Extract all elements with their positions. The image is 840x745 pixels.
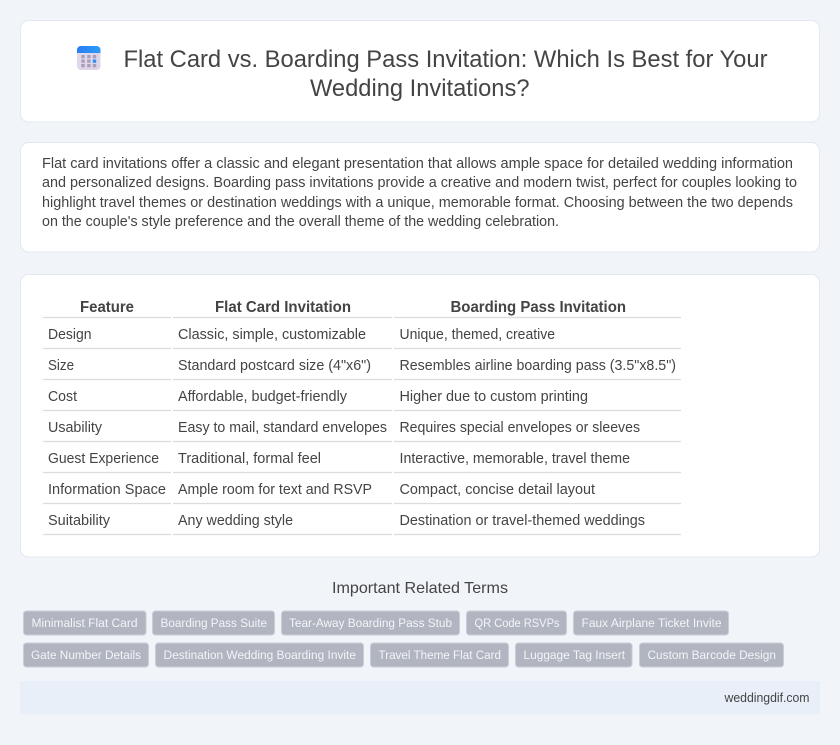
tag: Gate Number Details	[31, 648, 141, 662]
tag: Tear-Away Boarding Pass Stub	[289, 616, 452, 630]
tag: Boarding Pass Suite	[160, 616, 267, 630]
tag	[516, 643, 632, 667]
title: Wedding Invitations?	[310, 75, 530, 102]
row: design: Unique, themed, creative	[400, 327, 555, 343]
heading: important related terms: Important Related Terms	[332, 580, 508, 597]
row: information space: Information Space	[48, 482, 166, 498]
table header row: Flat Card Invitation	[215, 299, 351, 316]
row: size: Size	[48, 358, 74, 374]
table	[43, 299, 681, 534]
icon: calendar	[77, 46, 100, 70]
table header row: Boarding Pass Invitation	[450, 299, 626, 316]
row: information space: Compact, concise detail layout	[400, 482, 595, 498]
row: guest experience	[48, 451, 630, 467]
tag: Luggage Tag Insert	[524, 648, 626, 662]
row: cost	[48, 389, 588, 405]
tag: Faux Airplane Ticket Invite	[582, 616, 722, 630]
row: cost: Cost	[48, 389, 77, 405]
tag	[370, 643, 508, 667]
tag: Minimalist Flat Card	[32, 616, 138, 630]
tag	[156, 643, 364, 667]
intro paragraph	[42, 156, 797, 230]
row: design	[48, 327, 555, 343]
panel: comparison table	[20, 274, 820, 557]
tag: Custom Barcode Design	[648, 648, 776, 662]
footer: weddingdif.com	[724, 690, 810, 705]
tag: Travel Theme Flat Card	[378, 648, 501, 662]
intro paragraph: highlight travel themes or destination weddings with a unique, memorable format. Choosing between the two depends	[42, 195, 793, 211]
row: information space	[48, 482, 595, 498]
tag	[282, 611, 460, 635]
row: design: Design	[48, 327, 92, 343]
tag	[24, 611, 146, 635]
panel: header	[20, 20, 820, 122]
row: design: Classic, simple, customizable	[178, 327, 366, 343]
row: usability: Requires special envelopes or sleeves	[400, 420, 640, 436]
row: suitability: Suitability	[48, 513, 111, 529]
row: usability	[48, 420, 640, 436]
row: suitability	[48, 513, 645, 529]
tag	[574, 611, 728, 635]
tag	[152, 611, 274, 635]
row: size	[48, 358, 676, 374]
panel: introduction	[20, 142, 820, 252]
tag	[466, 611, 566, 635]
title	[124, 46, 768, 102]
row: size: Resembles airline boarding pass (3.5"x8.5")	[400, 358, 676, 374]
footer	[20, 681, 820, 714]
tag: Destination Wedding Boarding Invite	[164, 648, 356, 662]
table header row	[80, 299, 626, 316]
intro paragraph: Flat card invitations offer a classic and elegant presentation that allows ample space for detailed wedding information	[42, 156, 793, 172]
tag group: related terms	[24, 611, 784, 667]
row: size: Standard postcard size (4"x6")	[178, 358, 371, 374]
row: information space: Ample room for text and RSVP	[178, 482, 372, 498]
row: guest experience: Traditional, formal feel	[178, 451, 321, 467]
tag: QR Code RSVPs	[474, 616, 560, 630]
row: suitability: Destination or travel-themed weddings	[400, 513, 645, 529]
row: cost: Higher due to custom printing	[400, 389, 588, 405]
intro paragraph: and personalized designs. Boarding pass invitations provide a creative and modern twist, perfect for couples looking to	[42, 175, 797, 191]
tag	[24, 643, 148, 667]
title: Flat Card vs. Boarding Pass Invitation: Which Is Best for Your	[124, 46, 768, 73]
tag	[640, 643, 784, 667]
row: suitability: Any wedding style	[178, 513, 293, 529]
row: guest experience: Guest Experience	[48, 451, 159, 467]
intro paragraph: on the couple's style preference and the overall theme of the wedding celebration.	[42, 214, 559, 230]
table header row: Feature	[80, 299, 134, 316]
row: usability: Usability	[48, 420, 103, 436]
row: usability: Easy to mail, standard envelopes	[178, 420, 387, 436]
row: guest experience: Interactive, memorable, travel theme	[400, 451, 630, 467]
row: cost: Affordable, budget-friendly	[178, 389, 348, 405]
